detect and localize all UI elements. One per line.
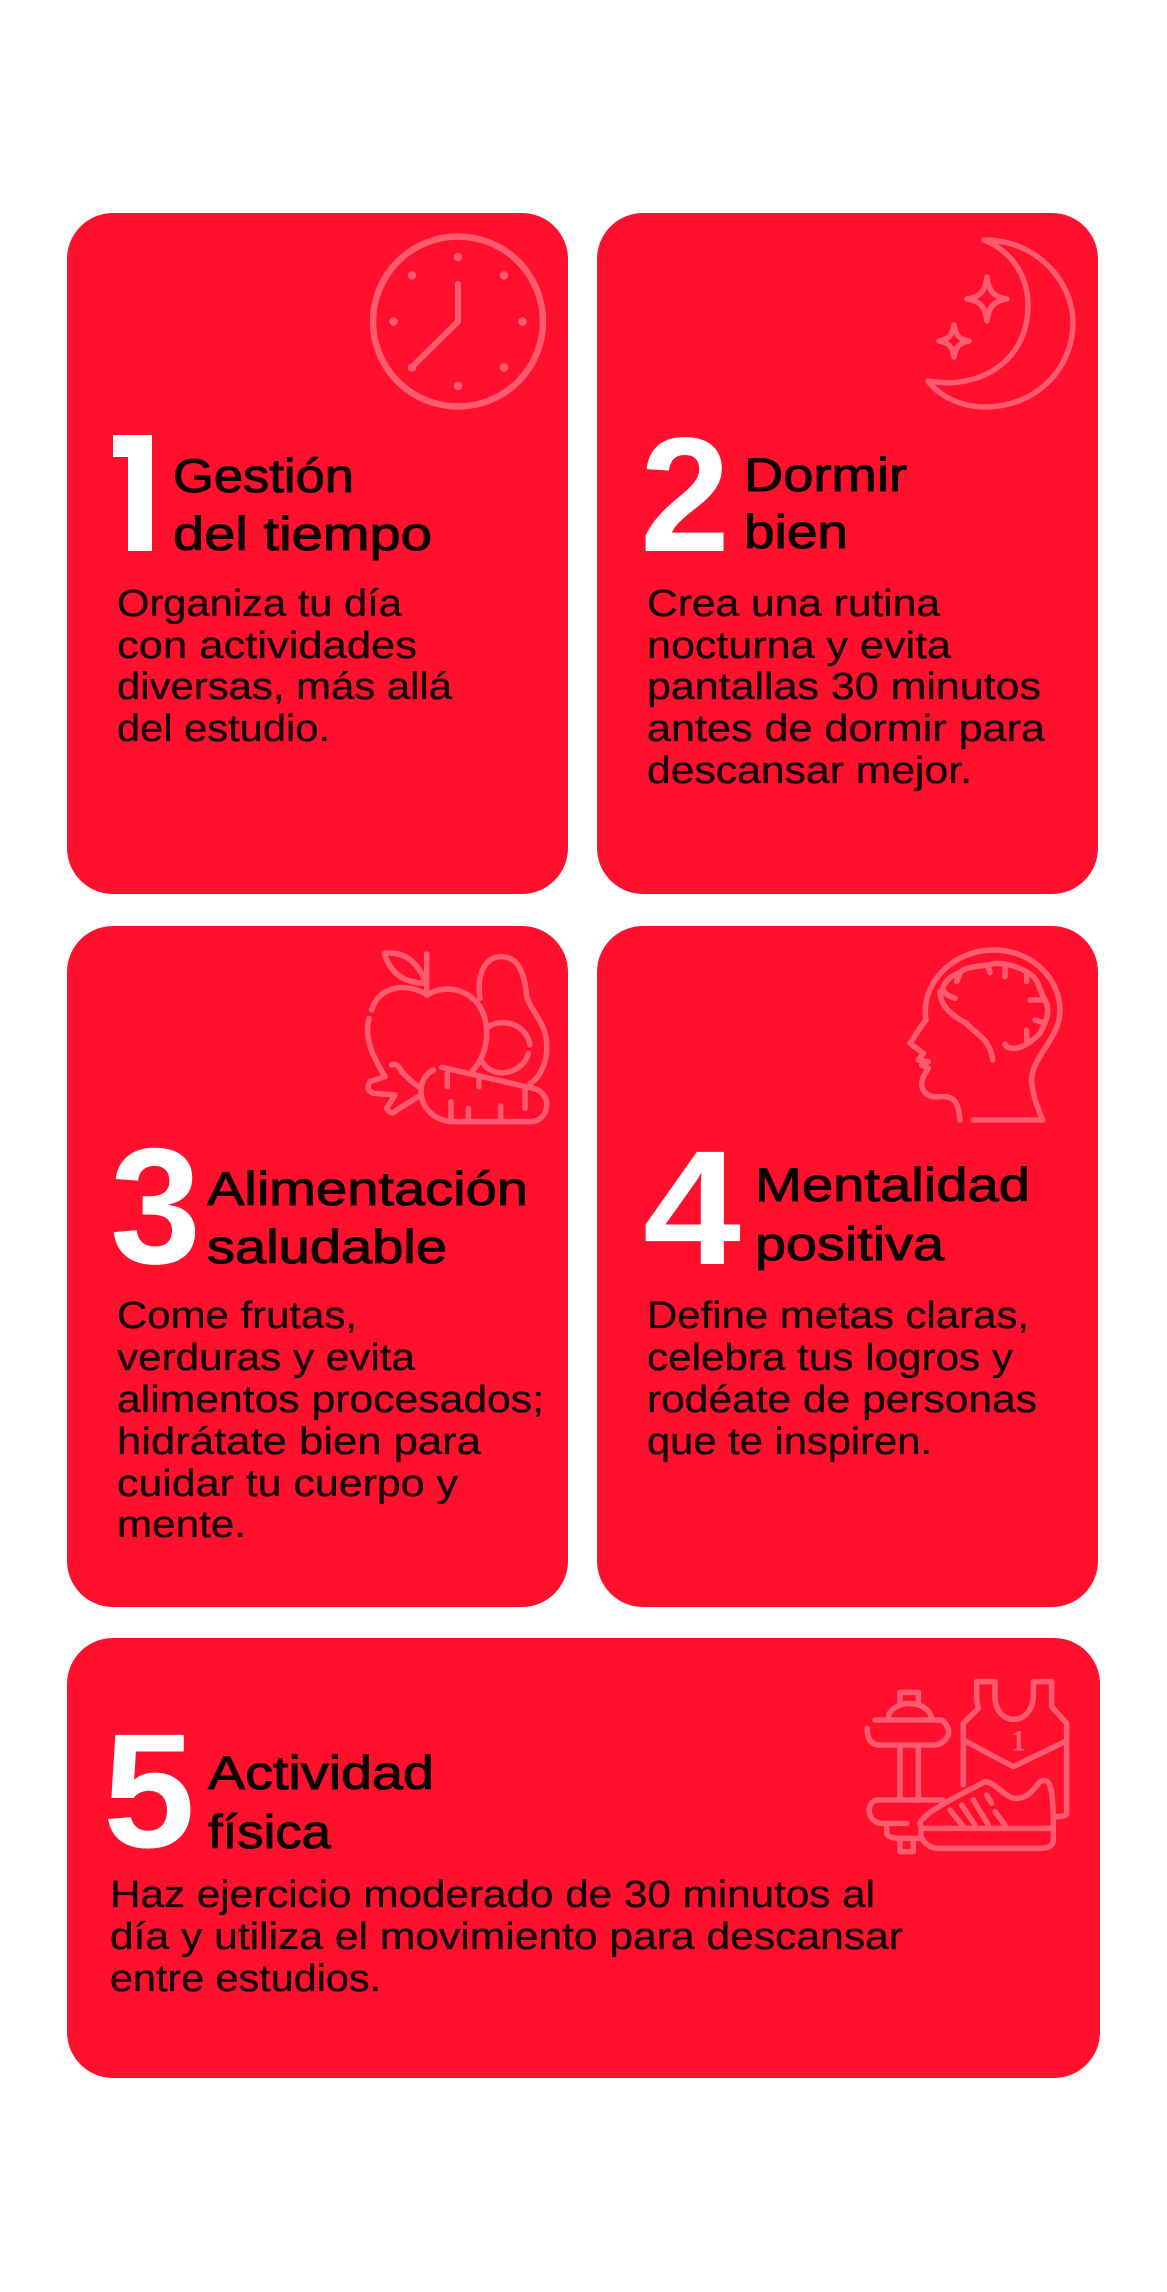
panel: 4 mentalidad positiva (597, 926, 1098, 1607)
body text: cuidar tu cuerpo y (117, 1463, 458, 1505)
body text: celebra tus logros y (647, 1337, 1013, 1379)
body text: del estudio. (117, 708, 330, 750)
number 3: 3 (110, 1114, 201, 1298)
body text: día y utiliza el movimiento para descansar (110, 1916, 903, 1958)
body text: verduras y evita (117, 1337, 416, 1379)
number 5: 5 (103, 1699, 195, 1882)
panel: 5 actividad física (67, 1638, 1100, 2078)
panel: 3 alimentación saludable (67, 926, 568, 1607)
body text (117, 1295, 544, 1546)
heading: Mentalidad (755, 1158, 1030, 1211)
body text: rodéate de personas (647, 1379, 1037, 1421)
icon: head with brain (910, 950, 1060, 1120)
body text: entre estudios. (110, 1958, 381, 2000)
body text (647, 583, 1046, 792)
heading (744, 448, 907, 558)
body text: pantallas 30 minutos (647, 666, 1041, 708)
body text (647, 1295, 1037, 1463)
number 2: 2 (640, 403, 730, 586)
body text: con actividades (117, 625, 417, 667)
body text: Define metas claras, (647, 1295, 1029, 1337)
body text: alimentos procesados; (117, 1379, 544, 1421)
heading (208, 1746, 434, 1858)
heading: Actividad (208, 1746, 434, 1799)
number 4: 4 (643, 1116, 741, 1299)
icon: dumbbell, tank top and shoe: 1 (1011, 1725, 1026, 1758)
heading (173, 449, 432, 560)
body text: mente. (117, 1504, 246, 1546)
number 1: 1 (95, 403, 186, 586)
heading: del tiempo (173, 507, 432, 560)
heading (207, 1162, 528, 1273)
icon: clock (373, 236, 543, 406)
body text (117, 583, 453, 750)
body text: hidrátate bien para (117, 1421, 482, 1463)
panel: 1 gestión del tiempo (67, 213, 568, 894)
body text: Organiza tu día (117, 583, 403, 625)
body text: descansar mejor. (647, 750, 972, 792)
heading: física (208, 1805, 332, 1858)
body text (110, 1874, 903, 2000)
heading: saludable (207, 1220, 447, 1273)
icon: dumbbell, tank top and shoe (867, 1682, 1067, 1852)
body text: Haz ejercicio moderado de 30 minutos al (110, 1874, 875, 1916)
heading (755, 1158, 1030, 1270)
body text: nocturna y evita (647, 625, 952, 667)
heading: bien (744, 505, 848, 558)
body text: diversas, más allá (117, 666, 453, 708)
icon: moon and stars (928, 240, 1073, 407)
heading: Dormir (744, 448, 907, 501)
infographic canvas (67, 213, 1100, 2078)
body text: Come frutas, (117, 1295, 357, 1337)
icon: fruit and vegetables (368, 953, 547, 1122)
body text: que te inspiren. (647, 1421, 932, 1463)
panel: 2 dormir bien (597, 213, 1098, 894)
number 1 (113, 435, 152, 551)
heading: Gestión (173, 449, 354, 502)
body text: antes de dormir para (647, 708, 1046, 750)
heading: Alimentación (207, 1162, 528, 1215)
heading: positiva (755, 1217, 945, 1270)
body text: Crea una rutina (647, 583, 941, 625)
